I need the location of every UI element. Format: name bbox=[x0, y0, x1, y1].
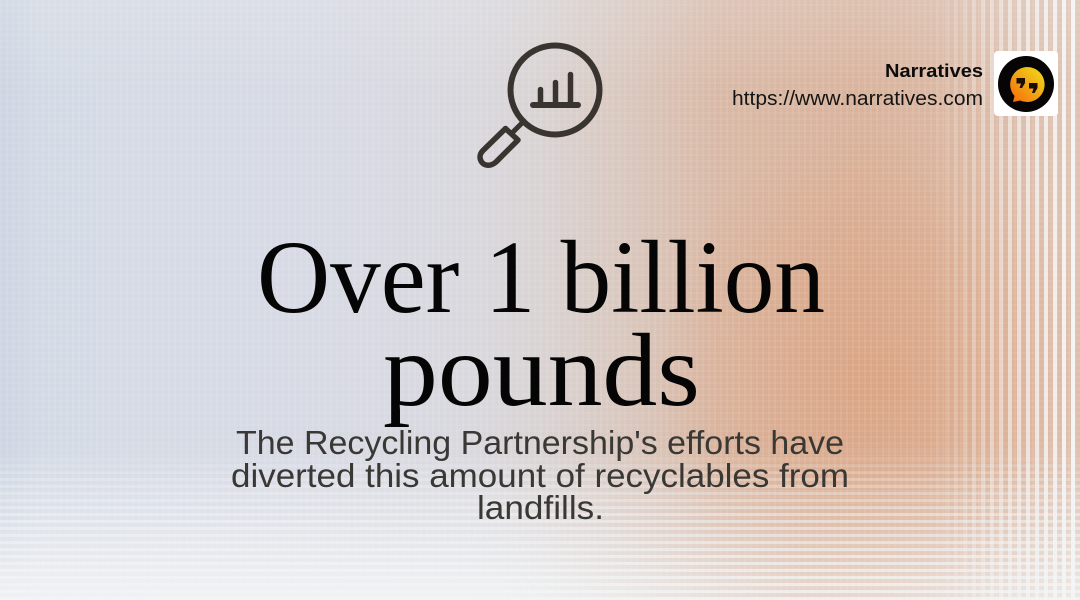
title: pounds bbox=[383, 313, 700, 428]
description text: The Recycling Partnership's efforts have bbox=[236, 424, 844, 461]
brand name: Narratives bbox=[885, 60, 983, 81]
brand url: https://www.narratives.com bbox=[732, 88, 983, 110]
icon: magnifying glass with bar chart bbox=[480, 46, 600, 165]
title bbox=[257, 220, 825, 428]
description text bbox=[231, 424, 849, 526]
title: Over 1 billion bbox=[257, 220, 825, 335]
description text: landfills. bbox=[477, 489, 604, 526]
logo: speech bubble badge bbox=[994, 51, 1058, 116]
description text: diverted this amount of recyclables from bbox=[231, 457, 849, 494]
